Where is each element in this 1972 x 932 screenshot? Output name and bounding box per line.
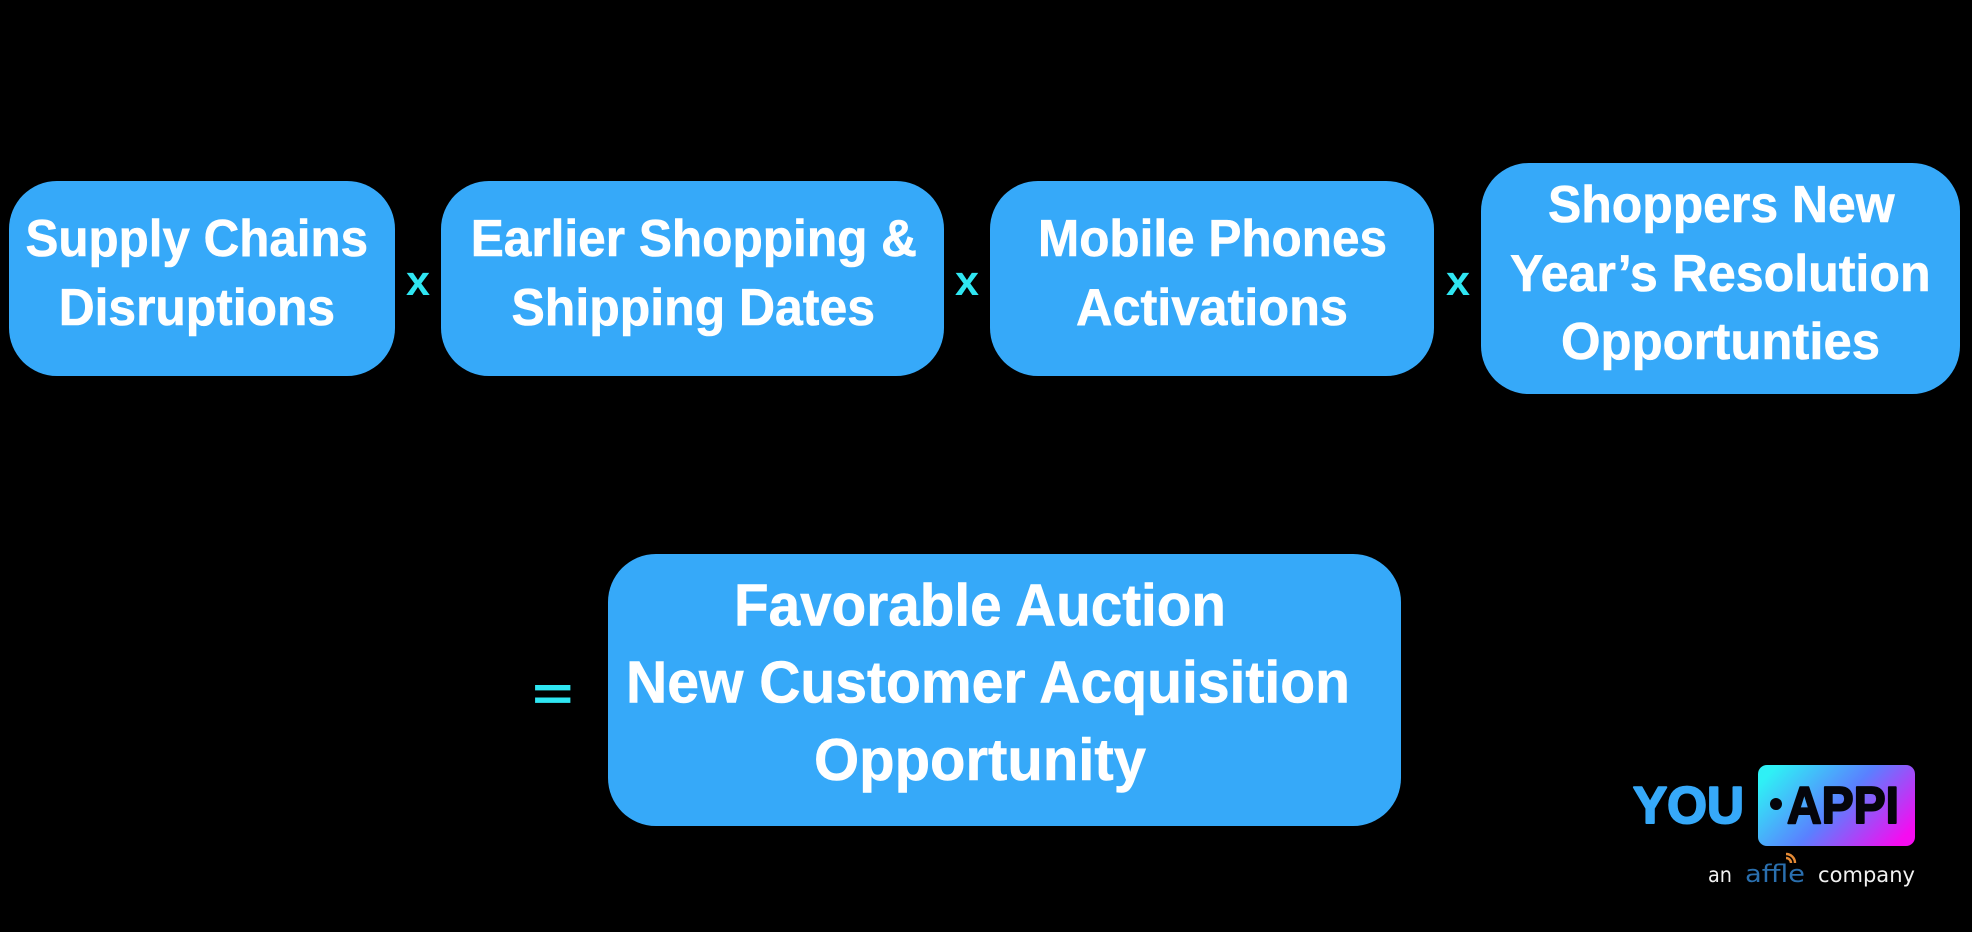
panel: earlier shopping and shipping dates (441, 181, 944, 376)
operator: multiply 2: x (955, 257, 980, 304)
panel: shoppers new year's resolution opportunities (1481, 163, 1960, 394)
panel: mobile phones activations: Activations (1076, 279, 1348, 337)
logo icon: signal arcs (1786, 854, 1795, 863)
logo wordmark: APPI: APPI (1787, 777, 1899, 835)
logo tagline: company: company (1818, 863, 1915, 887)
panel: mobile phones activations: Mobile Phones (1038, 210, 1387, 268)
operator: equals: = (533, 666, 572, 722)
panel: result favorable auction opportunity: Favorable Auction (734, 572, 1226, 638)
panel: earlier shopping and shipping dates: Earlier Shopping & (471, 210, 917, 268)
panel: shoppers new year's resolution opportunities: Shoppers New (1548, 176, 1895, 234)
logo wordmark: YOU: YOU (1633, 777, 1744, 835)
panel: mobile phones activations (990, 181, 1434, 376)
logo tagline: an: an (1708, 863, 1732, 887)
operator: multiply 3: x (1446, 257, 1471, 304)
panel: supply chains disruptions: Supply Chains (26, 210, 368, 268)
panel: earlier shopping and shipping dates: Shipping Dates (512, 279, 875, 337)
logo dot (1770, 798, 1782, 810)
logo tagline: affle: affle (1745, 860, 1805, 888)
panel: result favorable auction opportunity: Opportunity (814, 727, 1146, 793)
logo: YouAppi an affle company (1633, 765, 1915, 888)
operator: multiply 1: x (406, 257, 431, 304)
panel: result favorable auction opportunity: New Customer Acquisition (626, 650, 1350, 716)
panel: supply chains disruptions (9, 181, 395, 376)
logo badge: gradient rectangle (1758, 765, 1915, 846)
panel: result favorable auction opportunity (608, 554, 1401, 826)
panel: supply chains disruptions: Disruptions (59, 279, 335, 337)
panel: shoppers new year's resolution opportunities: Opportunties (1561, 313, 1880, 371)
panel: shoppers new year's resolution opportunities: Year’s Resolution (1510, 245, 1931, 303)
